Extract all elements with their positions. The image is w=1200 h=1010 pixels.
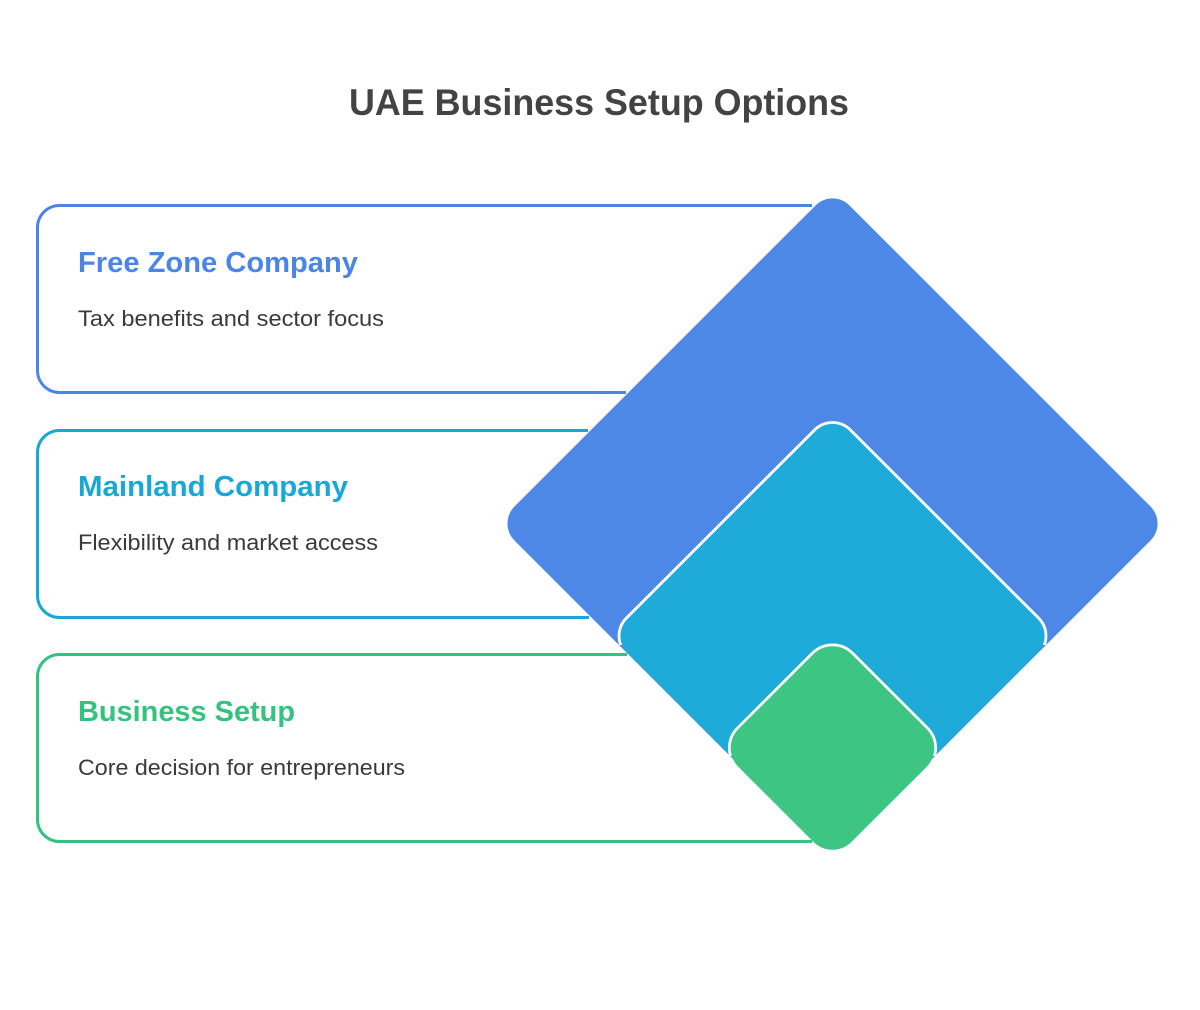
panel: mainland company (38, 430, 589, 618)
green fill (720, 635, 945, 861)
diamond: medium cyan (618, 421, 1048, 758)
heading: business setup: Business Setup (78, 696, 295, 728)
heading: mainland company: Mainland Company (78, 471, 348, 503)
text: business setup description: Core decision for entrepreneurs (78, 755, 405, 780)
cyan white outline (618, 421, 1048, 645)
diamond: small green (728, 644, 937, 850)
text: mainland description: Flexibility and market access (78, 530, 378, 555)
green white outline (728, 644, 937, 756)
panel border: business setup (38, 654, 812, 842)
panel: free zone company (38, 206, 812, 392)
panel: business setup (38, 654, 812, 842)
panel border: mainland (38, 430, 589, 618)
cyan fill (610, 414, 1055, 858)
text: free zone description: Tax benefits and sector focus (78, 306, 384, 331)
heading: free zone company: Free Zone Company (78, 247, 358, 279)
title: UAE Business Setup Options (349, 82, 849, 123)
panel border: free zone (38, 206, 812, 392)
diamond: large blue (497, 188, 1168, 859)
